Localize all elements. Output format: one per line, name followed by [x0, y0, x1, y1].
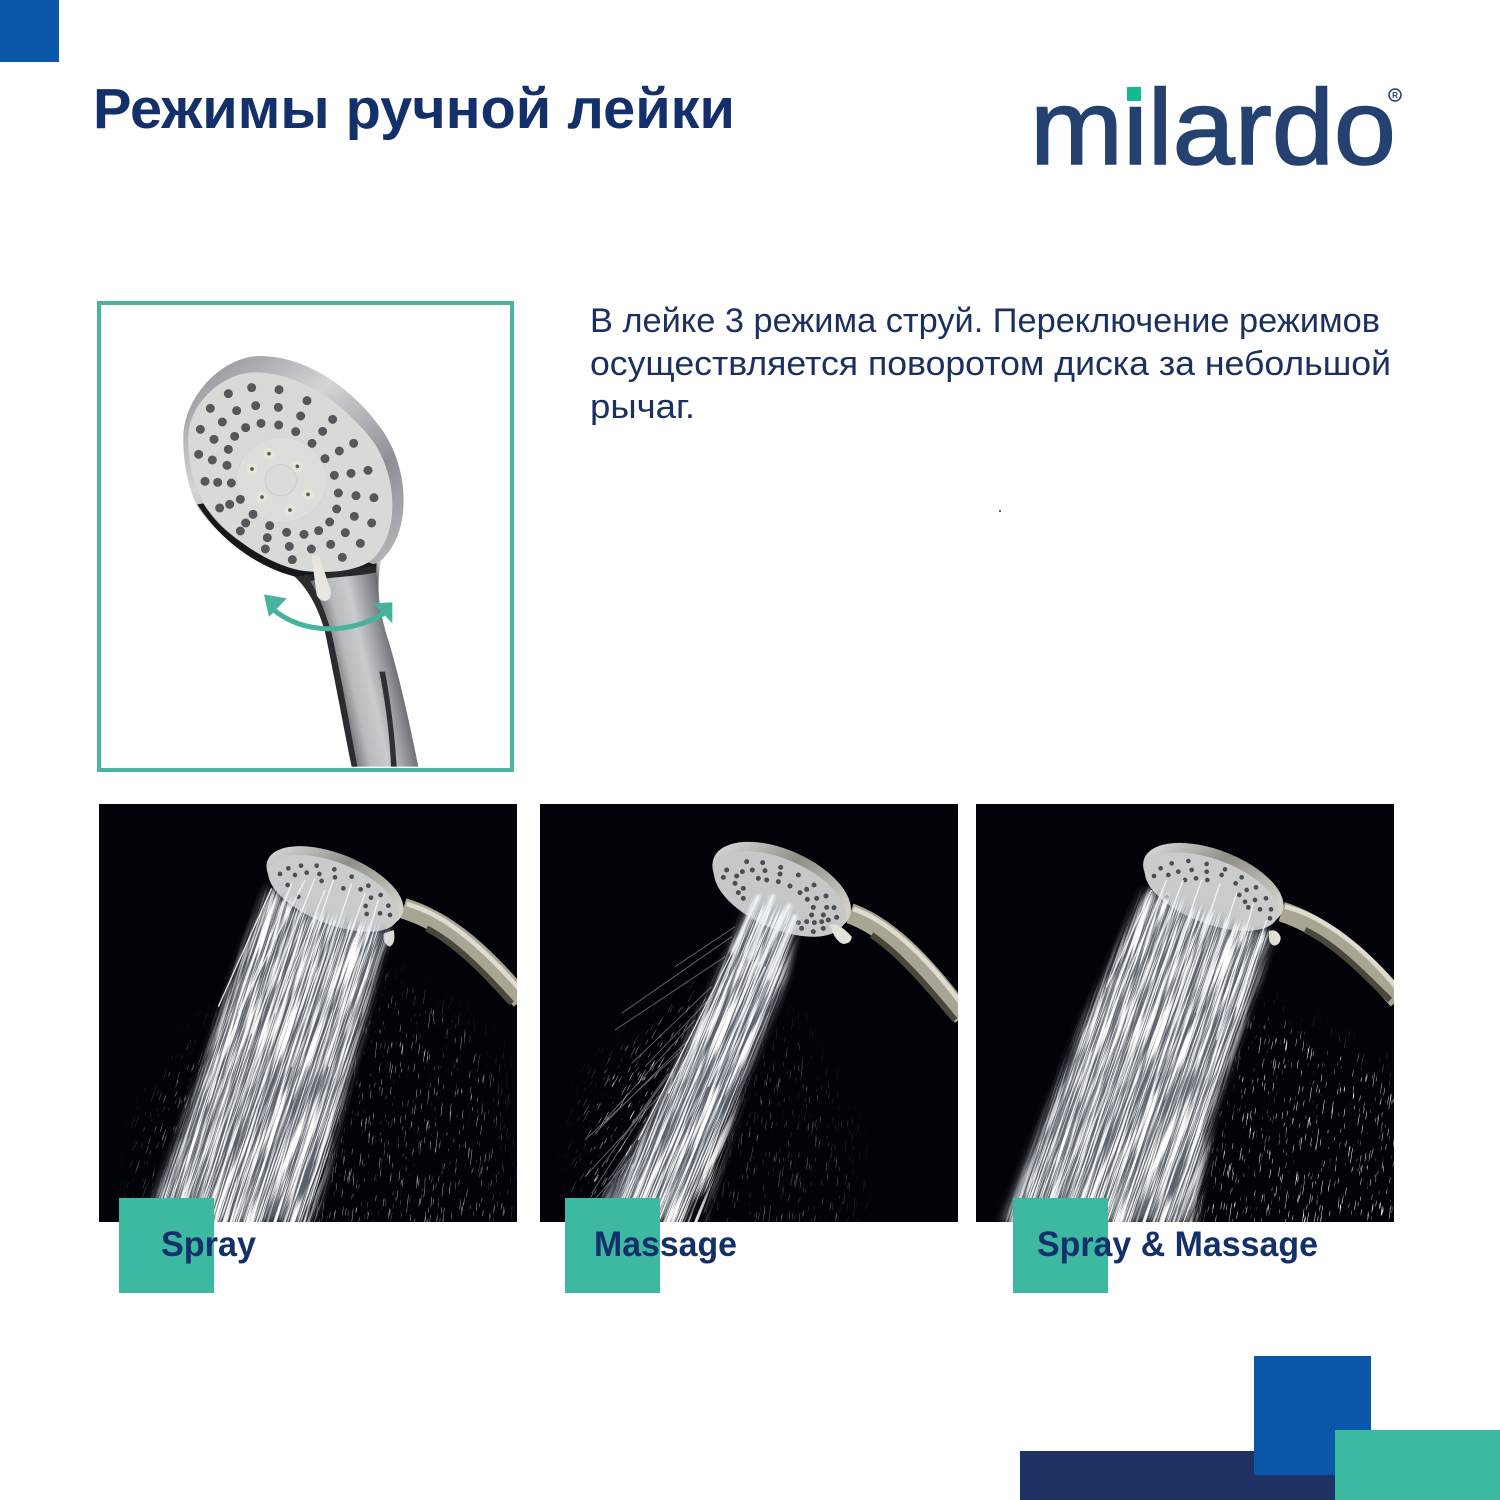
panel: shower head with switch lever — [99, 303, 512, 770]
decorative corner square: top left — [0, 0, 59, 62]
description text block: осуществляется поворотом диска за небольшой — [590, 345, 1391, 383]
description text block: В лейке 3 режима струй. Переключение режимов — [590, 302, 1380, 340]
panel: Massage photo — [540, 804, 958, 1222]
label: Spray and Massage — [1013, 1198, 1318, 1293]
description text block: рычаг. — [590, 388, 695, 426]
face — [188, 372, 392, 572]
handle — [403, 908, 522, 1000]
photo background — [99, 804, 517, 1222]
rotation arrow — [264, 594, 392, 629]
water spray — [148, 878, 394, 1222]
shower head — [712, 842, 852, 944]
logo: milardo: R — [1392, 91, 1398, 100]
panel: Spray and Massage photo — [976, 804, 1394, 1222]
photo background — [540, 804, 958, 1222]
handle — [287, 558, 418, 767]
water jet — [598, 894, 801, 1222]
illustration: shower head — [183, 356, 418, 767]
shower head — [266, 846, 404, 947]
nozzles — [199, 388, 374, 560]
title: Режимы ручной лейки — [93, 77, 735, 141]
description text block — [590, 302, 1391, 426]
panel frame — [99, 303, 512, 770]
water droplets — [559, 926, 871, 1222]
panel: Spray photo — [99, 804, 517, 1222]
label: Spray and Massage: Spray & Massage — [1037, 1225, 1318, 1264]
label: Massage — [565, 1198, 737, 1293]
inner ring and centre disc — [237, 437, 327, 523]
water droplets — [116, 961, 517, 1222]
handle — [850, 913, 963, 1017]
rim — [183, 356, 404, 575]
photo background — [976, 804, 1394, 1222]
handle — [1282, 912, 1398, 1000]
logo: milardo: milardo — [1030, 67, 1396, 187]
label: Spray — [119, 1198, 257, 1293]
shower head — [1143, 842, 1284, 946]
decorative blocks: bottom right — [1020, 1356, 1500, 1500]
water spray — [998, 880, 1275, 1222]
switch lever — [312, 555, 331, 601]
label: Massage: Massage — [594, 1225, 737, 1264]
label: Spray: Spray — [161, 1225, 257, 1264]
stray dot — [999, 510, 1001, 512]
water droplets — [1187, 994, 1394, 1222]
